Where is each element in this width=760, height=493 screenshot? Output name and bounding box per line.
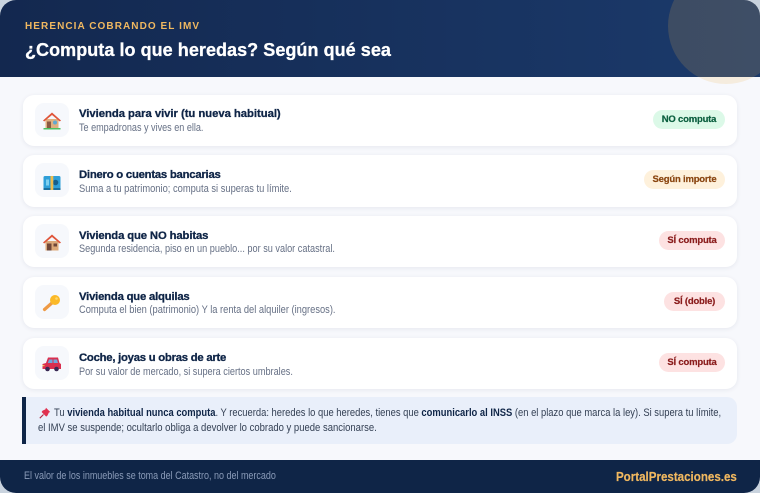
decorative header circle (668, 0, 760, 84)
badge: sí computa: SÍ computa (667, 357, 717, 368)
row heading: Vivienda que alquilas (79, 291, 190, 303)
row description: Computa el bien (patrimonio) Y la renta del alquiler (ingresos). (79, 304, 336, 316)
badge: sí computa (659, 231, 725, 250)
title: ¿Computa lo que heredas? Según qué sea (25, 40, 391, 60)
card: vivienda que alquilas (23, 277, 737, 328)
note line one: Tu vivienda habitual nunca computa. Y recuerda: heredes lo que heredes, tienes que comunicarlo al INSS (en el plazo que marca la ley). Si supera tu límite, (54, 407, 721, 419)
badge: NO computa: NO computa (662, 114, 716, 125)
badge: según importe: Según importe (653, 174, 716, 185)
row description: Por su valor de mercado, si supera ciertos umbrales. (79, 366, 293, 378)
header band (0, 0, 760, 77)
badge: sí computa: SÍ computa (667, 235, 717, 246)
footer brand: PortalPrestaciones.es (616, 469, 737, 484)
card: vivienda que no habitas (23, 216, 737, 267)
icon: house (35, 103, 69, 137)
row description: Segunda residencia, piso en un pueblo... por su valor catastral. (79, 243, 335, 255)
note line two: el IMV se suspende; ocultarlo obliga a devolver lo cobrado y puede sancionarse. (38, 422, 377, 434)
card: dinero (23, 155, 737, 207)
eyebrow label: HERENCIA COBRANDO EL IMV (25, 21, 200, 32)
card: coche, joyas, arte (23, 338, 737, 389)
row heading: Vivienda que NO habitas (79, 230, 208, 242)
row heading: Vivienda para vivir (tu nueva habitual) (79, 108, 281, 120)
icon: key (35, 285, 69, 319)
icon: house (35, 224, 69, 258)
icon: car (35, 346, 69, 380)
badge: según importe (644, 170, 725, 189)
icon: pushpin (40, 408, 50, 419)
card: vivienda para vivir (23, 95, 737, 146)
badge: sí computa (659, 353, 725, 372)
badge: NO computa (653, 110, 725, 129)
row description: Te empadronas y vives en ella. (79, 122, 203, 134)
footer band (0, 460, 760, 493)
icon: banknotes (35, 163, 69, 197)
badge: sí doble (664, 292, 725, 311)
row heading: Dinero o cuentas bancarias (79, 169, 221, 181)
footer note: El valor de los inmuebles se toma del Catastro, no del mercado (24, 470, 276, 482)
row heading: Coche, joyas u obras de arte (79, 352, 226, 364)
row description: Suma a tu patrimonio; computa si superas tu límite. (79, 183, 292, 195)
badge: sí doble: SÍ (doble) (674, 296, 715, 307)
callout note (22, 397, 737, 444)
